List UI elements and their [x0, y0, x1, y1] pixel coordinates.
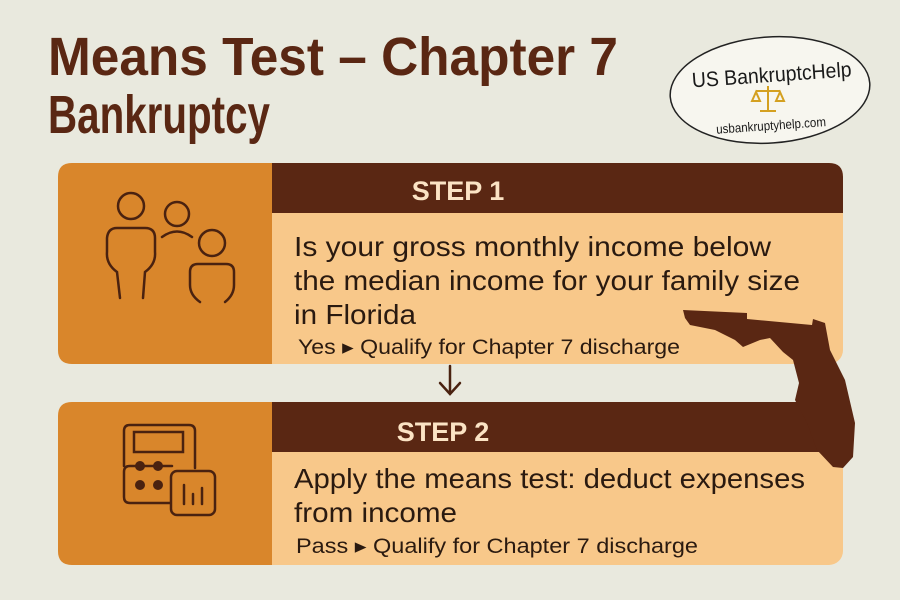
arrow [440, 366, 460, 394]
panel: step 1: STEP 1 [412, 176, 504, 206]
text block: step 2 [294, 463, 805, 528]
text block: step 2: from income [294, 497, 457, 528]
title: Means Test – Chapter 7 [48, 27, 618, 87]
text block: step 1 question: Is your gross monthly income below [294, 231, 772, 262]
text block: step 1 question: in Florida [294, 299, 416, 330]
panel: step 2 [58, 402, 843, 565]
text block: step 1 question: the median income for your family size [294, 265, 800, 296]
map: Florida [683, 310, 855, 468]
logo [667, 30, 873, 150]
panel: step 2: STEP 2 [397, 417, 489, 447]
title [48, 27, 618, 145]
title: Bankruptcy [48, 85, 270, 145]
text: step 2 result: Pass ▸ Qualify for Chapter 7 discharge [296, 535, 698, 558]
text block: step 2: Apply the means test: deduct expenses [294, 463, 805, 494]
icon: calculator [124, 425, 215, 515]
logo: usbankruptyhelp.com [716, 114, 826, 137]
panel: step 1 [58, 163, 843, 364]
text: step 1 result: Yes ▸ Qualify for Chapter 7 discharge [298, 336, 680, 359]
text block: step 1 question [294, 231, 800, 330]
icon: family [107, 193, 234, 302]
logo: US BankruptcHelp [691, 58, 852, 92]
